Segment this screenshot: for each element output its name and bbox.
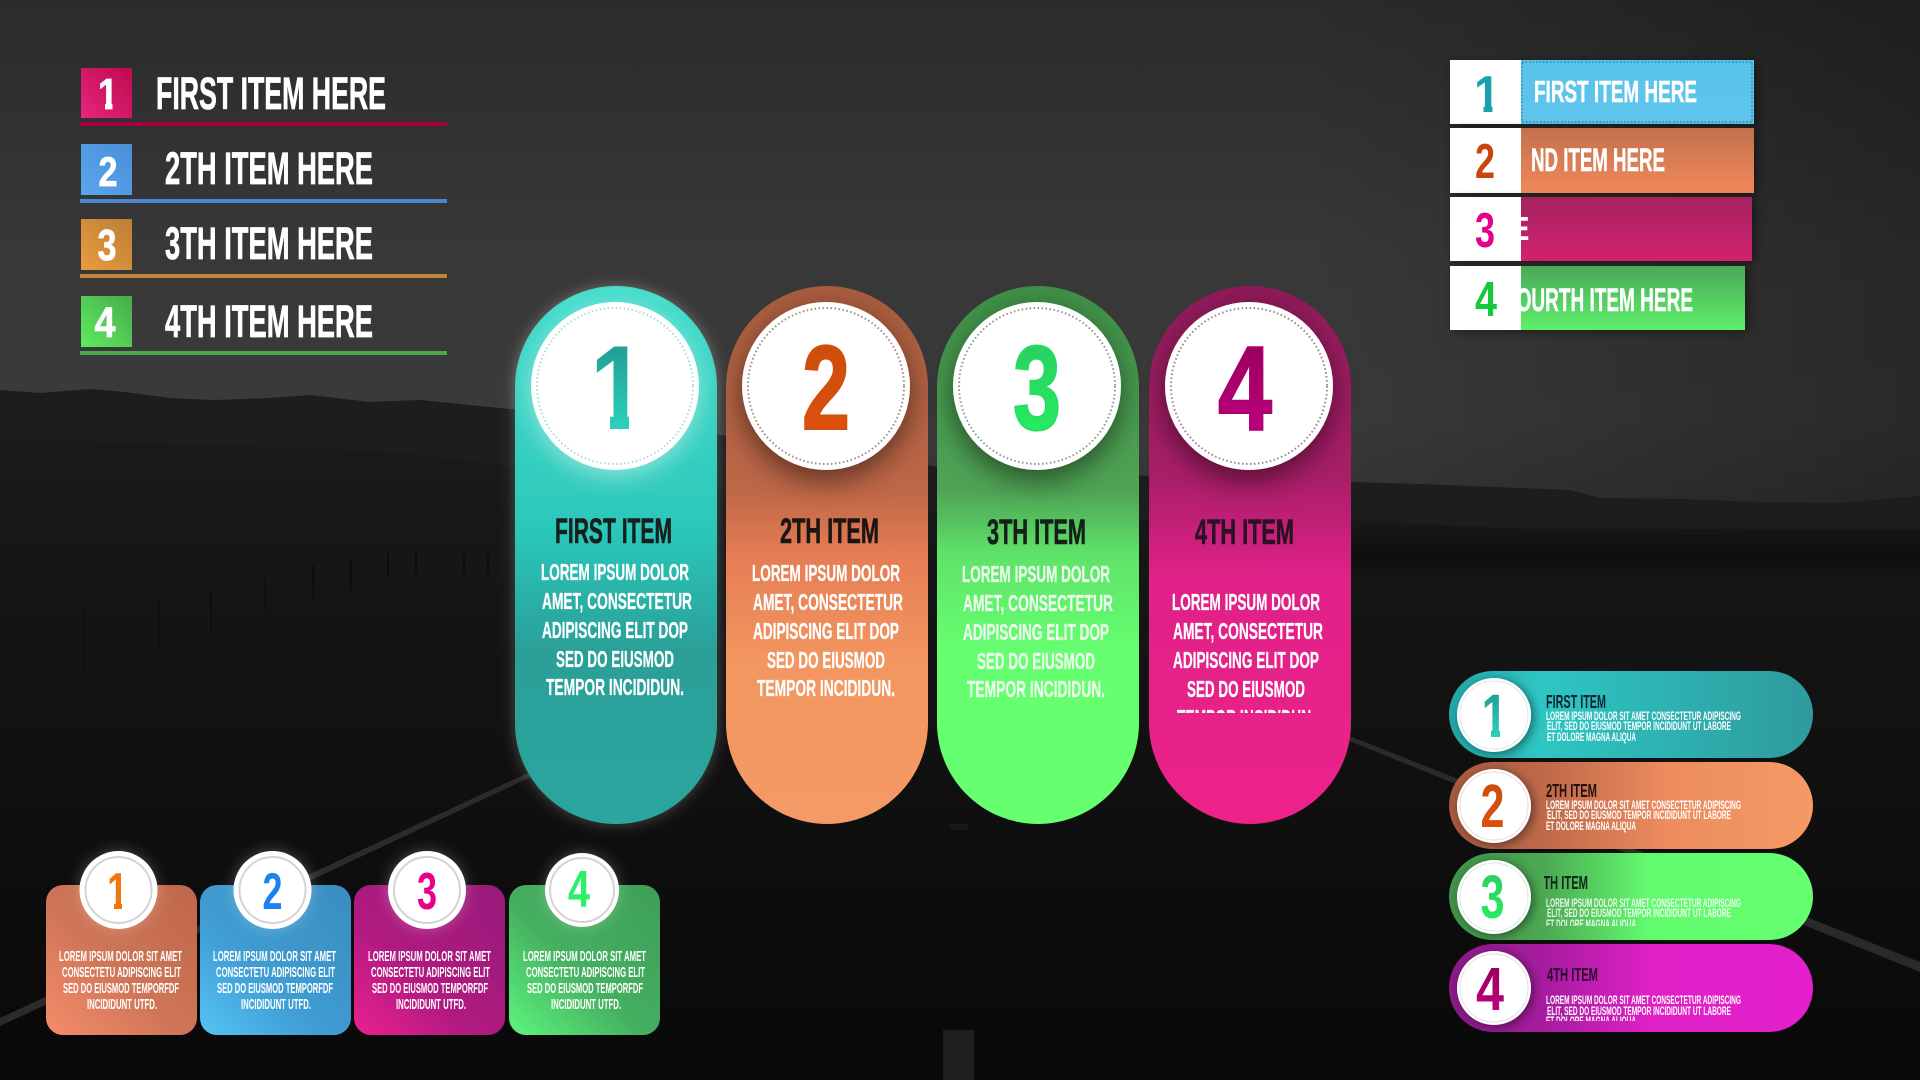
body text: ELIT, SED DO EIUSMOD TEMPOR INCIDIDUNT UT LABORE (1547, 1006, 1731, 1018)
body text: LOREM IPSUM DOLOR (962, 561, 1110, 587)
icon: number circle 2: 2 (802, 321, 850, 455)
banner 1: FIRST ITEM HERE (1534, 74, 1697, 109)
body text: SED DO EIUSMOD (1187, 676, 1305, 702)
heading: FIRST ITEM (1546, 692, 1606, 712)
card text (523, 948, 646, 1013)
item 4 row (80, 296, 447, 355)
body text: LOREM IPSUM DOLOR (752, 560, 900, 586)
body text (962, 561, 1113, 702)
heading: 4TH ITEM (1195, 513, 1294, 552)
body text: ADIPISCING ELIT DOP (963, 619, 1109, 645)
card text: CONSECTETU ADIPISCING ELIT (526, 964, 645, 981)
heading: 2TH ITEM (1546, 781, 1597, 801)
body text (752, 560, 903, 701)
body text: ADIPISCING ELIT DOP (542, 617, 688, 643)
top-left list of four headed items (80, 68, 447, 355)
heading: 4TH ITEM (1547, 965, 1598, 985)
banner 1: 1 (1474, 66, 1500, 124)
banner 1 (1450, 60, 1754, 124)
card text: INCIDIDUNT UTFD. (396, 996, 466, 1013)
icon: card number 3: 3 (417, 863, 437, 921)
bottom-left card 3 (354, 851, 505, 1035)
heading: 3TH ITEM (1537, 873, 1588, 893)
large pill 4 (1149, 286, 1351, 824)
card text: CONSECTETU ADIPISCING ELIT (371, 964, 490, 981)
icon: pill number 2 (1457, 769, 1531, 843)
body text: ET DOLORE MAGNA ALIQUA (1547, 732, 1636, 744)
body text: LOREM IPSUM DOLOR (541, 559, 689, 585)
body text: SED DO EIUSMOD (977, 648, 1095, 674)
body text: AMET, CONSECTETUR (1173, 618, 1323, 644)
card text: LOREM IPSUM DOLOR SIT AMET (523, 948, 646, 965)
body text: ADIPISCING ELIT DOP (753, 618, 899, 644)
body text: AMET, CONSECTETUR (753, 589, 903, 615)
card text: INCIDIDUNT UTFD. (87, 996, 157, 1013)
body text (1546, 996, 1741, 1021)
card text: LOREM IPSUM DOLOR SIT AMET (59, 948, 182, 965)
icon: pill number 3: 3 (1480, 863, 1504, 931)
card text: CONSECTETU ADIPISCING ELIT (216, 964, 335, 981)
icon: pill number 1: 1 (1482, 682, 1508, 750)
large pill 1 (515, 286, 717, 824)
body text (1546, 711, 1741, 744)
body text (1546, 800, 1741, 833)
icon: number circle 1: 1 (590, 321, 646, 455)
icon: number circle 3 (953, 302, 1121, 470)
item 1 row (80, 68, 447, 126)
icon: number circle 3: 3 (1013, 321, 1061, 455)
icon: pill number 4: 4 (1476, 955, 1504, 1023)
body text: ELIT, SED DO EIUSMOD TEMPOR INCIDIDUNT UT LABORE (1547, 908, 1731, 920)
icon: number circle 2 (742, 302, 910, 470)
icon: number circle 4: 4 (1218, 322, 1272, 456)
icon: pill number 2: 2 (1480, 772, 1504, 840)
item 3 row: 3TH ITEM HERE (165, 218, 373, 269)
icon: card number 2: 2 (262, 863, 282, 921)
body text: ET DOLORE MAGNA ALIQUA (1546, 821, 1636, 833)
body text: ADIPISCING ELIT DOP (1173, 647, 1319, 673)
item 2 row (80, 143, 447, 203)
body text: LOREM IPSUM DOLOR SIT AMET CONSECTETUR ADIPISCING (1546, 800, 1741, 812)
banner 2: ND ITEM HERE (1531, 142, 1665, 178)
body text (1546, 898, 1741, 926)
body text: SED DO EIUSMOD (556, 646, 674, 672)
icon: number circle 1 (531, 302, 699, 470)
body text: LOREM IPSUM DOLOR SIT AMET CONSECTETUR ADIPISCING (1546, 995, 1741, 1007)
banner 2: 2 (1475, 135, 1495, 189)
icon: card number 3 (388, 851, 466, 929)
body text: TEMPOR INCIDIDUN. (546, 674, 684, 700)
large pill 3 (937, 286, 1139, 824)
body text (1172, 594, 1323, 713)
icon: card number 1: 1 (107, 863, 128, 921)
card text: INCIDIDUNT UTFD. (551, 996, 621, 1013)
body text: AMET, CONSECTETUR (542, 588, 692, 614)
bottom-left card 4 (509, 853, 660, 1035)
card text (59, 948, 182, 1013)
body text: LOREM IPSUM DOLOR SIT AMET CONSECTETUR ADIPISCING (1546, 898, 1741, 910)
item 3 row: 3 (98, 221, 116, 270)
right horizontal pill 3 (1449, 853, 1813, 940)
bottom-left card 2 (200, 851, 351, 1035)
body text: ET DOLORE MAGNA ALIQUA (1546, 919, 1636, 931)
item 3 row (80, 218, 447, 278)
card text (213, 948, 336, 1013)
banner 3: E (1516, 210, 1529, 247)
right horizontal pill 1 (1449, 671, 1813, 758)
icon: number circle 4 (1165, 302, 1333, 470)
item 4 row: 4 (94, 299, 116, 347)
heading: FIRST ITEM (555, 512, 672, 551)
card text: SED DO EIUSMOD TEMPORFDF (527, 980, 643, 997)
card text: SED DO EIUSMOD TEMPORFDF (63, 980, 179, 997)
banner 4 (1450, 266, 1745, 330)
card text: SED DO EIUSMOD TEMPORFDF (217, 980, 333, 997)
item 2 row: 2 (98, 148, 118, 195)
body text: TEMPOR INCIDIDUN. (967, 676, 1105, 702)
card text: INCIDIDUNT UTFD. (241, 996, 311, 1013)
body text: SED DO EIUSMOD (767, 647, 885, 673)
banner 4: 4 (1475, 273, 1497, 327)
body text (541, 559, 692, 700)
icon: pill number 4 (1457, 951, 1531, 1025)
body text: LOREM IPSUM DOLOR (1172, 589, 1320, 615)
icon: card number 1 (80, 851, 158, 929)
item 1 row: FIRST ITEM HERE (156, 68, 386, 119)
top-right list of four numbered banners (1450, 60, 1754, 330)
large pill 2 (726, 286, 928, 824)
icon: pill number 3 (1457, 860, 1531, 934)
icon: card number 4: 4 (568, 861, 590, 919)
banner 2 (1450, 128, 1754, 193)
icon: pill number 1 (1457, 678, 1531, 752)
right horizontal pill 4 (1449, 944, 1813, 1032)
item 1 row: 1 (98, 70, 118, 119)
heading: 3TH ITEM (987, 513, 1086, 552)
body text: TEMPOR INCIDIDUN. (757, 675, 895, 701)
banner 3 (1450, 197, 1752, 261)
body text: ELIT, SED DO EIUSMOD TEMPOR INCIDIDUNT UT LABORE (1547, 810, 1731, 822)
banner 3: 3 (1475, 204, 1495, 258)
body text: LOREM IPSUM DOLOR SIT AMET CONSECTETUR ADIPISCING (1546, 711, 1741, 723)
card text: CONSECTETU ADIPISCING ELIT (62, 964, 181, 981)
icon: card number 4 (545, 853, 619, 927)
banner 4: FOURTH ITEM HERE (1505, 282, 1693, 318)
item 4 row: 4TH ITEM HERE (165, 296, 373, 347)
body text: TEMPOR INCIDIDUN. (1177, 705, 1315, 731)
card text: LOREM IPSUM DOLOR SIT AMET (213, 948, 336, 965)
item 2 row: 2TH ITEM HERE (165, 143, 373, 194)
icon: card number 2 (234, 851, 312, 929)
card text (368, 948, 491, 1013)
bottom-left card 1 (46, 851, 197, 1035)
body text: ET DOLORE MAGNA ALIQUA (1546, 1016, 1636, 1028)
body text: AMET, CONSECTETUR (963, 590, 1113, 616)
heading: 2TH ITEM (780, 512, 879, 551)
card text: LOREM IPSUM DOLOR SIT AMET (368, 948, 491, 965)
card text: SED DO EIUSMOD TEMPORFDF (372, 980, 488, 997)
body text: ELIT, SED DO EIUSMOD TEMPOR INCIDIDUNT UT LABORE (1547, 721, 1731, 733)
right horizontal pill 2 (1449, 762, 1813, 849)
